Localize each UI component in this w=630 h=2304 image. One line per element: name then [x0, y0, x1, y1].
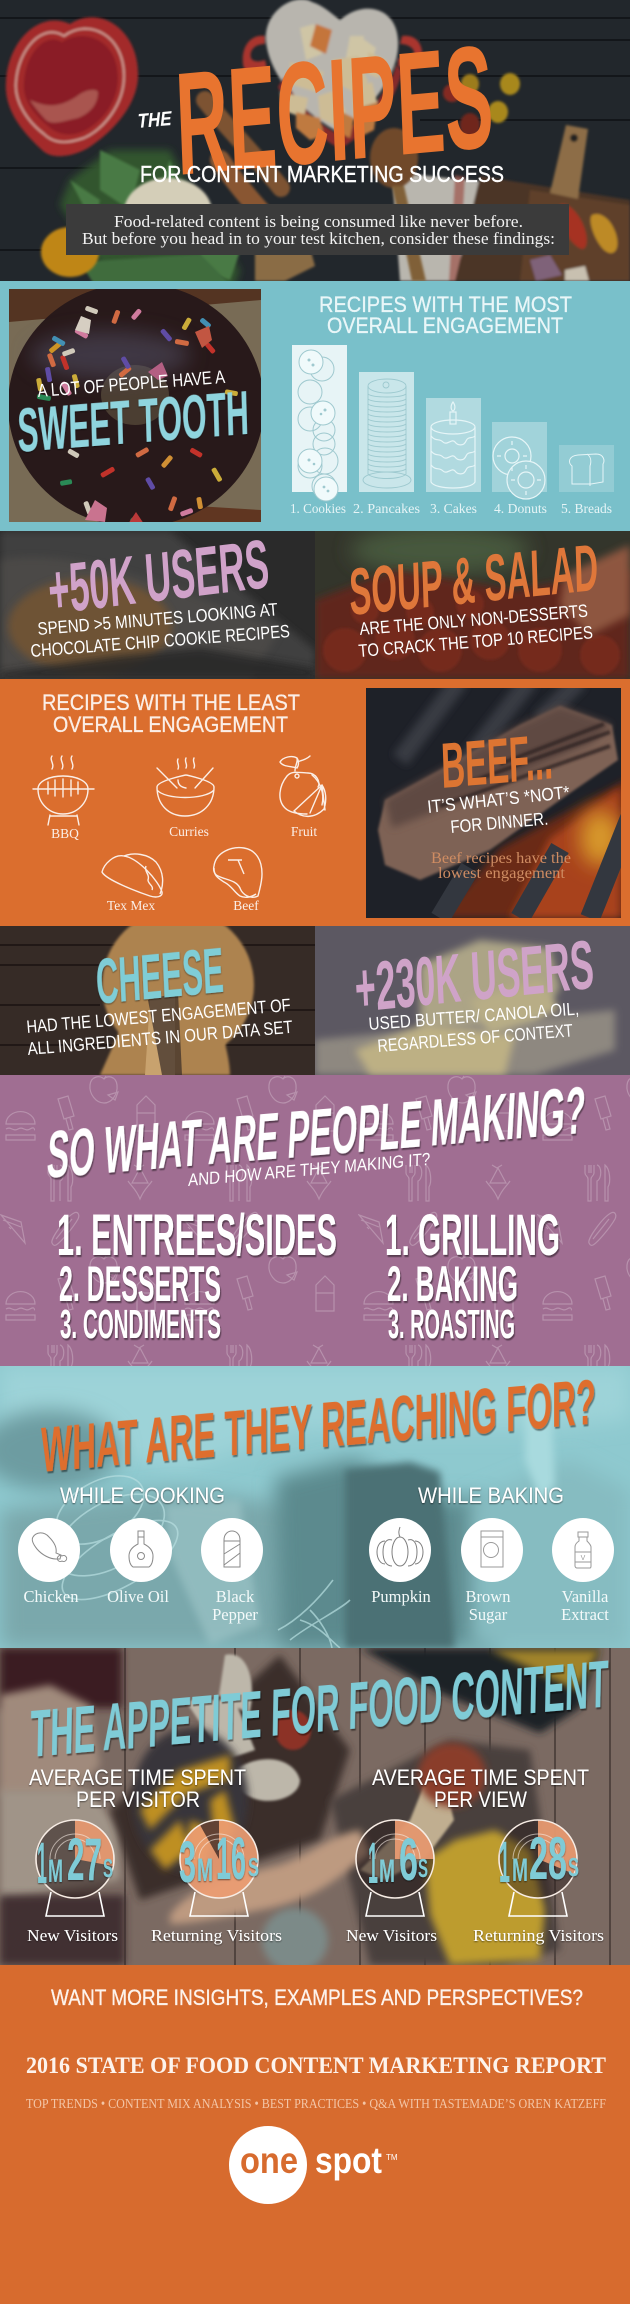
heading: RECIPES WITH THE LEAST — [42, 690, 300, 715]
logo: onespot — [229, 2126, 398, 2204]
sub-heading: per view: PER VIEW — [434, 1787, 527, 1812]
clock: new visitors per visitor: M — [48, 1853, 63, 1889]
ingredient labels: Extract — [561, 1605, 609, 1624]
sub-heading: while baking: WHILE BAKING — [418, 1483, 564, 1508]
panel: what are people making — [0, 1074, 630, 1366]
clock: returning visitors per view: 28 — [529, 1825, 567, 1892]
callout note: Beef recipes have the — [431, 850, 571, 867]
caption: CHOCOLATE CHIP COOKIE RECIPES — [30, 621, 291, 661]
icon labels: Tex Mex — [107, 898, 155, 913]
sub-heading: per view: AVERAGE TIME SPENT — [372, 1765, 589, 1790]
donut photo callout — [8, 283, 264, 529]
clock labels: New Visitors — [346, 1926, 437, 1945]
bar labels: 5. Breads — [561, 501, 612, 516]
panel: most engagement — [0, 281, 630, 531]
clock: new visitors per visitor: S — [103, 1853, 113, 1883]
bar chart: top recipes — [292, 345, 614, 501]
clock: new visitors per view — [356, 1820, 434, 1916]
bar labels: 2. Pancakes — [353, 501, 420, 516]
clock: new visitors per view: 6 — [399, 1826, 418, 1893]
icon labels: Fruit — [291, 824, 317, 839]
carrots — [205, 100, 282, 236]
tea towel and board — [392, 125, 630, 281]
caption: SPEND >5 MINUTES LOOKING AT — [37, 599, 279, 639]
sub-heading: per visitor: AVERAGE TIME SPENT — [29, 1765, 246, 1790]
white heart bowl with vegetables — [243, 0, 422, 149]
logo: onespot: TM — [386, 2153, 398, 2162]
caption: ARE THE ONLY NON-DESSERTS — [359, 601, 589, 639]
panel: cheese: CHEESE — [94, 934, 225, 1018]
panel: least engagement — [32, 688, 621, 918]
ingredient labels: Vanilla — [562, 1587, 609, 1606]
callout text: FOR DINNER. — [450, 809, 549, 837]
ingredient labels: Pepper — [212, 1605, 258, 1624]
photo: butter — [315, 926, 630, 1075]
list: what people make: 2. DESSERTS — [59, 1256, 221, 1312]
callout headline: SWEET TOOTH — [17, 379, 250, 466]
bar: breads — [559, 445, 614, 492]
heading: OVERALL ENGAGEMENT — [53, 712, 288, 737]
ingredient labels: Olive Oil — [107, 1587, 169, 1606]
caption: USED BUTTER/ CANOLA OIL, — [368, 999, 580, 1034]
caption — [30, 599, 291, 661]
caption: HAD THE LOWEST ENGAGEMENT OF — [26, 995, 291, 1037]
ingredient labels: Chicken — [24, 1587, 78, 1606]
intro box: But before you head in to your test kitchen, consider these findings: — [82, 229, 555, 248]
icon: fruit — [280, 756, 326, 816]
panel: +230K users — [315, 925, 630, 1075]
bar labels: 4. Donuts — [494, 501, 547, 516]
icon: chicken — [18, 1518, 80, 1582]
icon: vanilla extract — [552, 1518, 614, 1582]
photo: tomatoes — [315, 526, 630, 679]
callout text — [426, 782, 571, 837]
greens and cauliflower — [39, 146, 316, 281]
list: what people make: 3. CONDIMENTS — [60, 1301, 221, 1347]
bar labels: 3. Cakes — [430, 501, 477, 516]
caption — [358, 601, 594, 661]
headline: +50K USERS — [46, 524, 271, 629]
clock: returning visitors per view: S — [568, 1852, 579, 1882]
caption — [26, 995, 293, 1059]
bar: cookies — [292, 345, 347, 501]
clock: returning visitors per view — [499, 1820, 579, 1916]
icon: vanilla extract: V — [581, 1555, 586, 1562]
list: what people make — [57, 1203, 337, 1347]
sub-heading: per view — [372, 1765, 589, 1812]
ingredient labels: Pumpkin — [371, 1587, 431, 1606]
icon: brown sugar — [461, 1518, 523, 1582]
report title: 2016 STATE OF FOOD CONTENT MARKETING REPORT — [26, 2053, 606, 2078]
bar: cakes — [426, 398, 481, 492]
icon: beef steak — [214, 848, 262, 897]
photo: cookie — [0, 531, 315, 679]
photo: shared meal on wood table — [0, 1648, 630, 1972]
clock labels: Returning Visitors — [151, 1926, 282, 1945]
sub-heading: per visitor — [29, 1765, 246, 1812]
heading — [319, 292, 572, 338]
clock: returning visitors per visitor: 16 — [216, 1825, 246, 1892]
subtitle: FOR CONTENT MARKETING SUCCESS — [140, 161, 504, 187]
clock: returning visitors per view: M — [512, 1852, 528, 1888]
icon: black pepper — [201, 1518, 263, 1582]
heading: OVERALL ENGAGEMENT — [327, 313, 563, 338]
clock: returning visitors per view: 1 — [499, 1830, 510, 1895]
caption: ALL INGREDIENTS IN OUR DATA SET — [27, 1017, 293, 1059]
clock: returning visitors per visitor: M — [197, 1852, 213, 1888]
bar: pancakes — [359, 372, 414, 492]
panel: cheese — [0, 926, 315, 1075]
logo: onespot: spot — [315, 2140, 382, 2181]
photo: cheese on wood — [0, 926, 315, 1075]
panel: +50K users — [0, 524, 315, 679]
heading: RECIPES WITH THE MOST — [319, 292, 572, 317]
clock: returning visitors per visitor: 3 — [179, 1830, 196, 1895]
panel: soup and salad — [315, 526, 630, 679]
red heart bowl — [6, 17, 138, 156]
clock labels — [27, 1926, 604, 1945]
bar: donuts — [492, 422, 547, 499]
ingredient labels: Black — [216, 1587, 255, 1606]
callout note: lowest engagement — [438, 865, 566, 882]
callout line: A LOT OF PEOPLE HAVE A — [37, 366, 226, 401]
ingredient labels: Brown — [466, 1587, 510, 1606]
icon: pumpkin — [369, 1518, 431, 1582]
icon labels: BBQ — [51, 826, 79, 841]
clock: new visitors per visitor — [36, 1820, 114, 1916]
icon labels — [51, 824, 317, 913]
logo: onespot: one — [240, 2140, 298, 2181]
beef photo callout — [366, 680, 630, 918]
clock: returning visitors per visitor — [179, 1820, 259, 1916]
sub-heading: while cooking: WHILE COOKING — [60, 1483, 225, 1508]
icon: curries bowl — [157, 758, 214, 816]
sub-heading: per visitor: PER VISITOR — [76, 1787, 200, 1812]
photo: kitchen utensils, teal tint — [0, 1366, 630, 1648]
clock labels: New Visitors — [27, 1926, 118, 1945]
hero photo: overhead kitchen table — [0, 0, 630, 281]
icon: olive oil — [110, 1518, 172, 1582]
ingredient labels — [24, 1587, 609, 1624]
icon: bbq — [33, 756, 94, 825]
panel: what are they reaching for — [0, 1365, 630, 1648]
caption: REGARDLESS OF CONTEXT — [377, 1020, 574, 1056]
callout note — [431, 850, 571, 882]
icon labels: Beef — [233, 898, 259, 913]
heading — [42, 690, 300, 737]
clock: new visitors per view: S — [418, 1853, 428, 1883]
caption — [368, 999, 580, 1056]
intro box — [66, 204, 569, 255]
panel: appetite for food content — [0, 1647, 630, 1972]
ingredient labels: Sugar — [469, 1605, 508, 1624]
clock: returning visitors per visitor: S — [248, 1852, 259, 1882]
list: how people make it — [385, 1203, 560, 1347]
clock: new visitors per visitor: 27 — [67, 1826, 102, 1893]
bar labels: 1. Cookies — [290, 501, 346, 516]
clock: new visitors per view: 1 — [368, 1831, 378, 1896]
list: what people make: 1. ENTREES/SIDES — [57, 1203, 337, 1268]
intro box: Food-related content is being consumed like never before. — [114, 212, 523, 231]
sub-heading: AND HOW ARE THEY MAKING IT? — [188, 1149, 431, 1190]
icon: taco — [102, 854, 163, 897]
title word: the: THE — [136, 108, 173, 133]
clock: new visitors per view: M — [379, 1853, 395, 1889]
bar labels — [290, 501, 612, 516]
callout text: IT’S WHAT’S *NOT* — [426, 782, 571, 817]
peppers and tomatoes — [370, 73, 520, 281]
icon labels: Curries — [169, 824, 209, 839]
panel: hero header — [0, 0, 630, 281]
clock labels: Returning Visitors — [473, 1926, 604, 1945]
panel: footer call to action — [0, 1965, 630, 2304]
clock: new visitors per visitor: 1 — [37, 1831, 47, 1896]
